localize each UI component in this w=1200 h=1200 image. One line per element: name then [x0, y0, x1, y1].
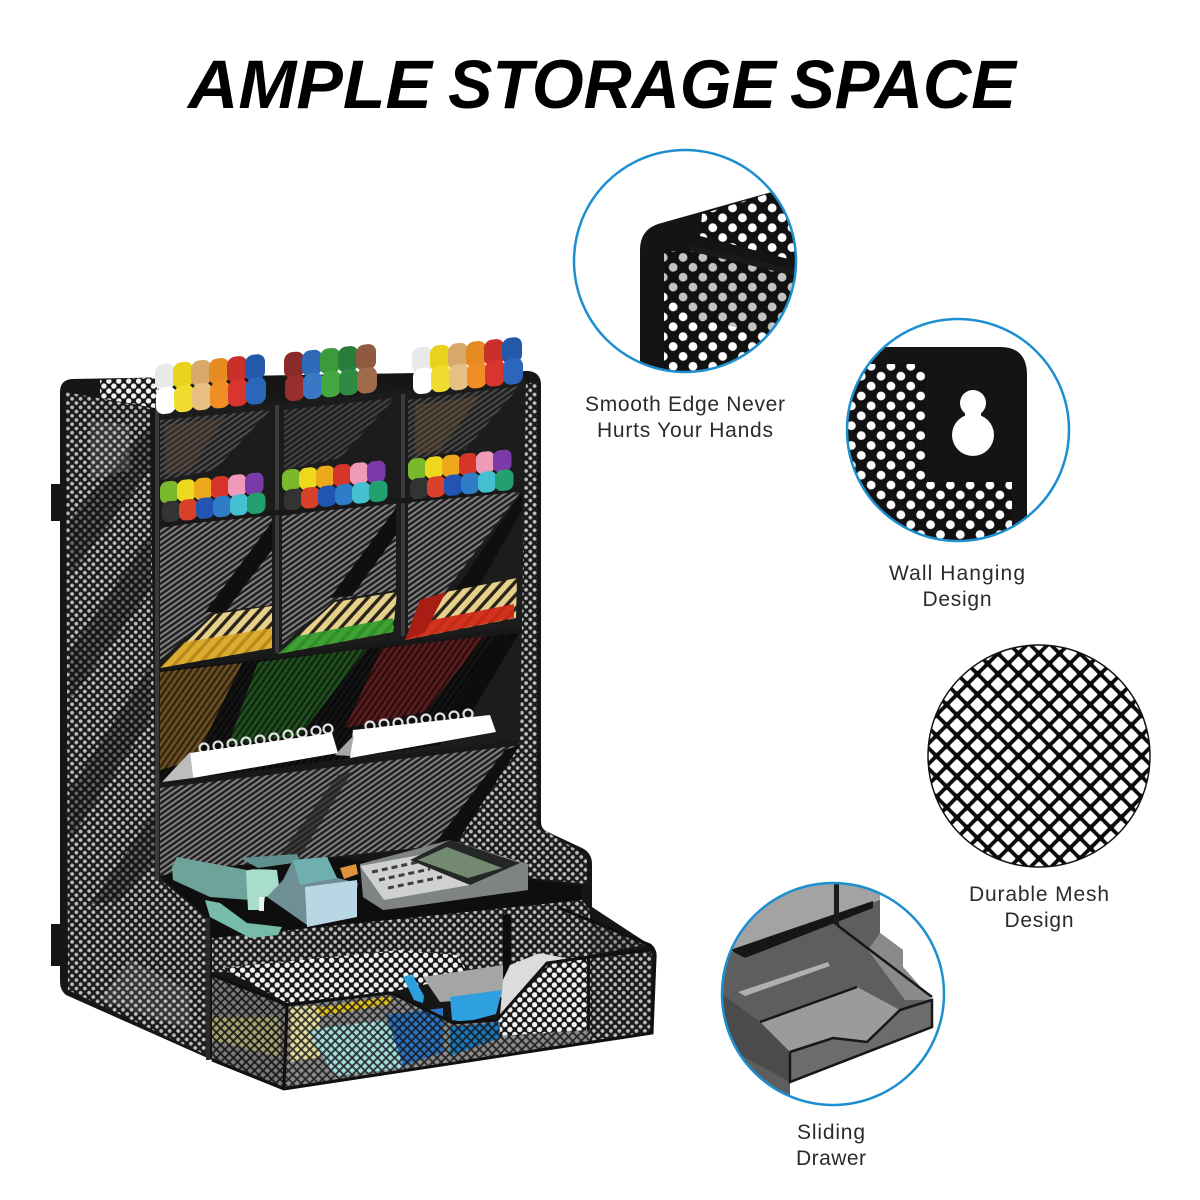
zoom circle: mesh [928, 645, 1150, 867]
row 4 compartment [160, 745, 520, 876]
callout: sliding drawer [720, 880, 944, 1170]
caption: Drawer [796, 1147, 866, 1170]
sliding drawer [208, 907, 655, 1089]
marker caps: second row [160, 449, 514, 523]
organizer silhouette [60, 371, 655, 1089]
stapler [172, 857, 282, 938]
caption: Durable Mesh [969, 883, 1109, 906]
vertical dividers [275, 394, 405, 653]
pencils: green [278, 592, 397, 654]
callout: durable mesh [928, 645, 1150, 932]
black shelf [160, 858, 582, 938]
drawer right end mesh [590, 950, 652, 1042]
zoom circle: rounded corner [572, 148, 798, 374]
drawer side base [212, 975, 287, 1087]
zoom circle: keyhole [840, 319, 1069, 560]
caption: Smooth Edge Never [585, 393, 785, 416]
drawer interior right [497, 958, 587, 1036]
caption [969, 883, 1109, 932]
spiral notebooks [162, 710, 496, 782]
right side mesh strip [445, 382, 587, 884]
drawer side and front mesh overlay [212, 975, 287, 1087]
shelf lips [156, 378, 526, 880]
caption [585, 393, 785, 442]
left side mesh panel [66, 392, 206, 1055]
drawer rear right mesh [513, 907, 645, 955]
row 1 compartments [160, 386, 520, 480]
title: STORAGE [448, 46, 778, 123]
tape holder [240, 854, 358, 927]
callout: smooth edge [574, 150, 800, 442]
drawer contents [212, 953, 565, 1076]
caption: Design [922, 588, 992, 611]
mesh under shelf [212, 900, 590, 976]
pencils: red [405, 578, 517, 640]
notebook rings [200, 710, 472, 752]
compartments background [156, 378, 526, 880]
title: AMPLE [186, 46, 434, 123]
caption: Design [1004, 909, 1074, 932]
pencils: yellow [160, 606, 272, 668]
wall hanging tabs [51, 484, 62, 966]
diagonal dividers [205, 492, 522, 612]
caption: Wall Hanging [889, 562, 1025, 585]
product: mesh desk organizer [51, 336, 655, 1089]
title [186, 46, 1018, 123]
under-shelf post [503, 914, 511, 975]
marker caps: top row [155, 336, 523, 415]
row 2 compartments [160, 490, 522, 660]
shadow bands on side panel [70, 425, 155, 905]
row 3 compartments [160, 630, 520, 785]
top back mesh [100, 377, 160, 408]
drawer floor mesh [222, 950, 470, 1003]
caption [796, 1121, 866, 1170]
caption: Hurts Your Hands [597, 419, 773, 442]
zoom circle: drawer [720, 880, 944, 1110]
callout: wall hanging [840, 319, 1069, 611]
title: SPACE [790, 46, 1018, 123]
drawer rims [212, 907, 655, 1089]
calculator [340, 840, 528, 910]
caption [889, 562, 1025, 611]
drawer front base [284, 993, 590, 1087]
caption: Sliding [797, 1121, 865, 1144]
